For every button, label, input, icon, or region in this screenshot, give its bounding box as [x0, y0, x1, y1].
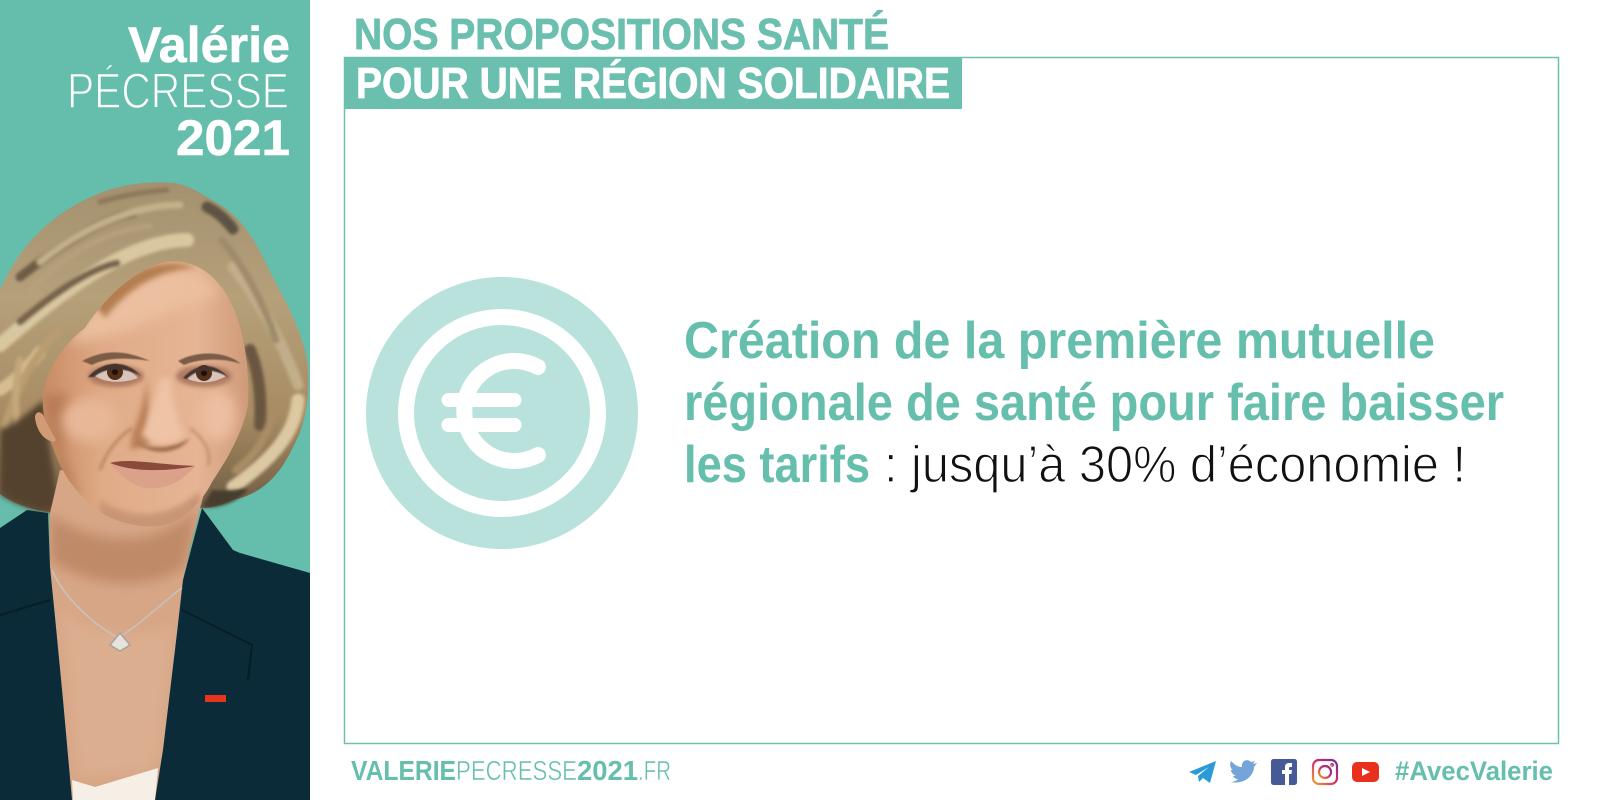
panel: left teal sidebar	[0, 0, 310, 800]
face	[35, 261, 248, 540]
icon: euro coin	[366, 277, 638, 549]
footer website: 2021	[577, 755, 638, 786]
footer website	[351, 755, 671, 786]
icon: youtube	[1352, 762, 1379, 782]
hashtag: #AvecValerie	[1395, 756, 1553, 786]
heading	[344, 9, 962, 109]
hair	[0, 182, 308, 513]
footer website: VALERIE	[351, 755, 456, 786]
main text	[684, 312, 1504, 494]
jacket	[0, 508, 310, 800]
line 3 body: : jusqu’à 30% d’économie !	[884, 436, 1466, 494]
eyes	[95, 369, 138, 382]
lapel pin	[205, 695, 226, 702]
eye shadow	[88, 365, 144, 387]
icon: telegram	[1189, 761, 1216, 783]
social icons	[1189, 756, 1553, 786]
icon: twitter	[1230, 760, 1257, 783]
ear	[35, 412, 56, 442]
year: 2021: 2021	[176, 110, 290, 166]
footer website: .FR	[638, 755, 671, 786]
line 2: régionale de santé pour faire baisser	[684, 374, 1504, 432]
nose	[130, 375, 150, 450]
necklace	[52, 570, 182, 651]
eyebrows	[82, 352, 150, 365]
heading line 2: POUR UNE RÉGION SOLIDAIRE	[356, 58, 950, 108]
icon: instagram	[1313, 760, 1337, 784]
heading line 1: NOS PROPOSITIONS SANTÉ	[354, 9, 889, 59]
footer website: PECRESSE	[456, 755, 577, 786]
portrait photo of Valérie Pécresse	[0, 182, 310, 800]
name: Pécresse: PÉCRESSE	[67, 63, 289, 119]
face shading	[43, 263, 236, 540]
lips	[110, 461, 195, 488]
main content frame	[344, 58, 1558, 744]
name: Valérie: Valérie	[128, 17, 290, 73]
line 1: Création de la première mutuelle	[684, 312, 1435, 370]
white top	[72, 768, 158, 800]
heading bar	[344, 57, 962, 109]
cheek crease	[100, 428, 132, 470]
line 3 emphasis: les tarifs	[684, 436, 870, 494]
icon: facebook	[1271, 759, 1297, 785]
neck and chest	[50, 470, 205, 800]
